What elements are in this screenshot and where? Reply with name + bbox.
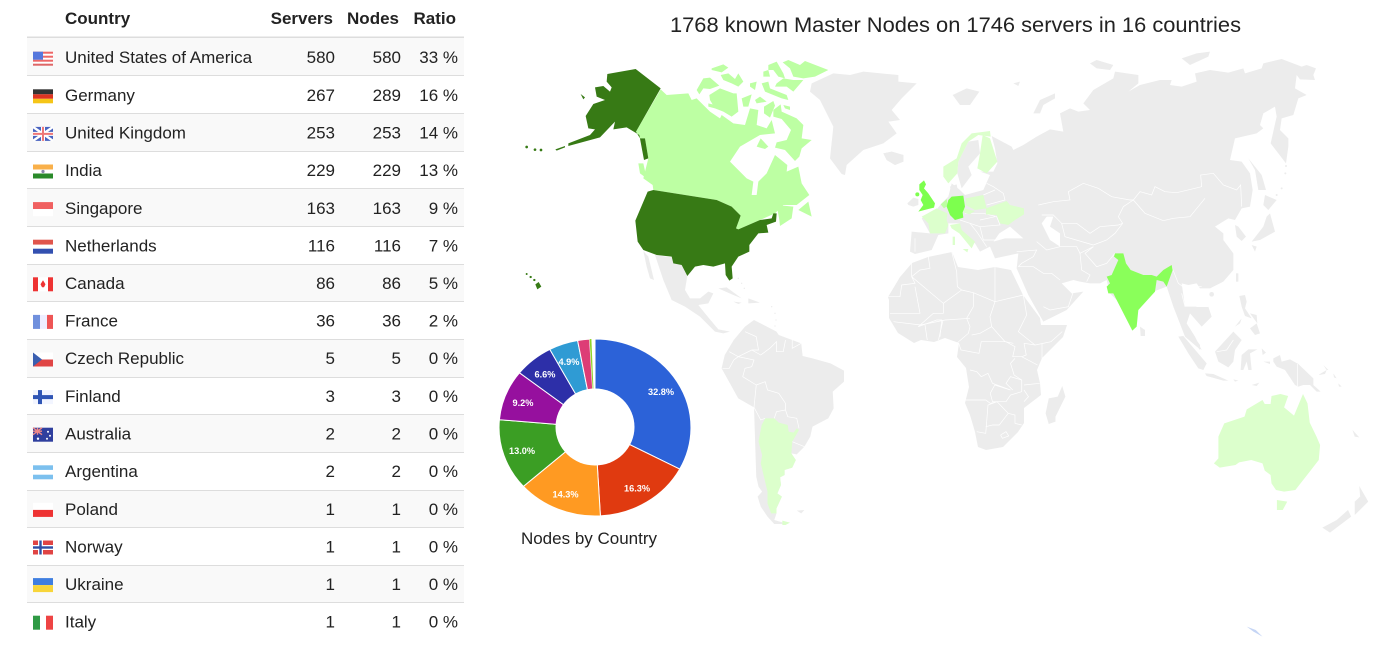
row: Singapore: 163	[373, 199, 401, 218]
row: Finland: 3	[392, 387, 401, 406]
row: United States of America: 580	[307, 48, 335, 67]
slice percentage labels: 16.3%	[624, 484, 650, 494]
row: Finland: Finland	[65, 387, 121, 406]
donut chart: nodes by country	[499, 339, 691, 548]
row: Poland: 1	[326, 500, 335, 519]
world map	[525, 52, 1368, 637]
row: Singapore: 9 %	[429, 199, 458, 218]
data table: nodes by country	[27, 9, 464, 632]
map title: 1768 known Master Nodes on 1746 servers in 16 countries	[670, 12, 1241, 37]
row: Finland	[27, 387, 464, 415]
table header: Ratio	[414, 9, 456, 28]
row: Norway	[27, 538, 464, 566]
row: France: 36	[316, 312, 335, 330]
row: Ukraine: Ukraine	[65, 575, 124, 594]
table header: Nodes	[347, 9, 399, 28]
row: Norway: 1	[392, 538, 401, 556]
row: Canada	[27, 265, 464, 302]
slice percentage labels: 6.6%	[535, 370, 555, 380]
row: Netherlands: Netherlands	[65, 236, 157, 256]
Canada mainland	[636, 89, 812, 229]
Canadian Arctic islands	[697, 60, 828, 161]
slice percentage labels: 14.3%	[552, 490, 579, 500]
Europe with node countries	[907, 131, 1024, 252]
slice percentage labels: 32.8%	[648, 387, 674, 397]
table header	[27, 9, 464, 38]
Asian and European borders	[915, 173, 1242, 310]
row: Canada: Canada	[65, 274, 125, 293]
row: Argentina: Argentina	[65, 462, 138, 481]
row: France: France	[65, 312, 118, 330]
row: Poland: 0 %	[429, 500, 458, 519]
row: Canada: 86	[382, 274, 401, 293]
row: Netherlands	[27, 236, 464, 265]
USA with Alaska and Hawaii	[525, 69, 777, 289]
row: United States of America: United States of America	[65, 48, 253, 67]
row: Poland	[27, 491, 464, 528]
row: Canada: 86	[316, 274, 335, 293]
donut slices	[499, 339, 691, 516]
row: Czech Republic: 5	[392, 349, 401, 368]
row: Canada: 5 %	[429, 274, 458, 293]
chart title: Nodes by Country	[521, 529, 658, 548]
row: Australia: 2	[392, 424, 401, 444]
Americas landmasses	[525, 69, 917, 333]
slice percentage labels	[509, 357, 674, 500]
row: India	[27, 161, 464, 189]
South American and southern African borders	[722, 318, 1062, 447]
UK and Germany	[915, 180, 965, 220]
India	[1107, 253, 1173, 331]
row: Singapore: Singapore	[65, 199, 143, 218]
row: Australia: Australia	[65, 424, 132, 444]
row: Germany: Germany	[65, 86, 135, 105]
row: Australia: 2	[326, 424, 335, 444]
Caspian Sea	[1042, 217, 1060, 247]
faint map artefact	[1247, 627, 1262, 637]
row: United Kingdom	[27, 114, 464, 152]
row: Finland: 3	[326, 387, 335, 406]
row: Australia: 0 %	[429, 424, 458, 444]
row: India: 229	[307, 161, 335, 180]
North Africa borders	[888, 252, 1035, 345]
Scandinavia and Ireland in grey	[907, 140, 980, 207]
Eurasia and islands	[883, 52, 1316, 350]
row: Singapore: 163	[307, 199, 335, 218]
row: Czech Republic: Czech Republic	[65, 349, 185, 368]
row: United Kingdom: United Kingdom	[65, 124, 186, 142]
light green countries	[922, 131, 1024, 252]
row: United States of America	[27, 38, 464, 76]
table header: Country	[65, 9, 131, 28]
row: Italy: 1	[392, 612, 401, 632]
row: Germany: 267	[307, 86, 335, 105]
row: France: 36	[382, 312, 401, 330]
row: Czech Republic: 0 %	[429, 349, 458, 368]
row: Argentina: 0 %	[429, 462, 458, 481]
row: Germany: 16 %	[419, 86, 458, 105]
southern hemisphere landmasses	[722, 318, 1368, 637]
row: Czech Republic: 5	[326, 349, 335, 368]
Eurasia	[883, 52, 1316, 350]
row: Norway: 0 %	[429, 538, 458, 556]
row: India: 13 %	[419, 161, 458, 180]
row: Czech Republic	[27, 340, 464, 378]
Africa	[888, 252, 1067, 450]
donut hole	[556, 388, 634, 466]
Argentina and Australia	[758, 394, 1320, 525]
Southeast Asia islands	[1178, 295, 1342, 392]
row: Argentina	[27, 462, 464, 491]
row: Australia	[27, 415, 464, 453]
row: France	[27, 312, 464, 340]
row: United Kingdom: 14 %	[419, 124, 458, 142]
row: Ukraine: 1	[392, 575, 401, 594]
row: Argentina: 2	[326, 462, 335, 481]
row: Ukraine: 1	[326, 575, 335, 594]
slice percentage labels: 4.9%	[559, 357, 579, 367]
row: India: India	[65, 161, 102, 180]
row: France: 2 %	[429, 312, 458, 330]
row: Singapore	[27, 189, 464, 227]
table header: Servers	[271, 9, 333, 28]
row: Ukraine: 0 %	[429, 575, 458, 594]
row: Netherlands: 116	[308, 236, 335, 256]
row: Ukraine	[27, 566, 464, 603]
row: United States of America: 33 %	[419, 48, 458, 67]
slice percentage labels: 13.0%	[509, 446, 535, 456]
slice percentage labels: 9.2%	[513, 398, 533, 408]
row: Netherlands: 116	[374, 236, 401, 256]
row: Finland: 0 %	[429, 387, 458, 406]
row: Germany	[27, 86, 464, 114]
row: Italy	[33, 612, 458, 632]
row: Italy: Italy	[65, 612, 97, 632]
row: United Kingdom: 253	[307, 124, 335, 142]
South America, Madagascar and New Zealand	[722, 320, 1368, 533]
row: Norway: Norway	[65, 538, 123, 556]
row: Netherlands: 7 %	[429, 236, 458, 256]
row: Italy: 0 %	[429, 612, 458, 632]
row: Norway: 1	[326, 538, 335, 556]
row: Italy: 1	[326, 612, 335, 632]
row: United States of America: 580	[373, 48, 401, 67]
row: United Kingdom: 253	[373, 124, 401, 142]
row: Argentina: 2	[392, 462, 401, 481]
row: India: 229	[373, 161, 401, 180]
Greenland, Iceland, Mexico and Caribbean	[643, 72, 917, 333]
row: Poland: Poland	[65, 500, 118, 519]
row: Germany: 289	[373, 86, 401, 105]
row: Poland: 1	[392, 500, 401, 519]
